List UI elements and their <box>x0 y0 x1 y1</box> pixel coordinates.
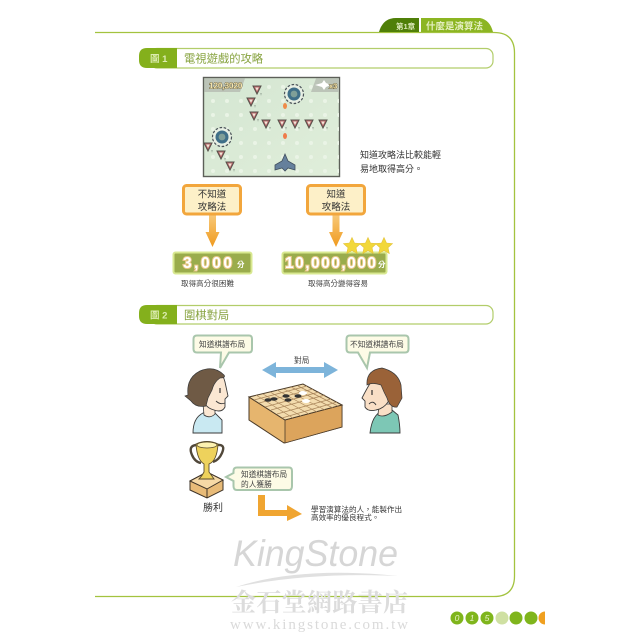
game screenshot <box>204 78 340 176</box>
speech bubble: winner: 知道棋譜布局 <box>241 469 287 479</box>
heading: figure 1 <box>139 48 493 68</box>
conclusion text: 高效率的優良程式。 <box>311 512 379 522</box>
watermark: 金石堂網路書店 <box>231 589 408 617</box>
double arrow <box>262 362 338 378</box>
person: right <box>362 368 402 433</box>
watermark <box>230 533 408 633</box>
page number dots: 5 <box>485 613 490 623</box>
side note: 知道攻略法比較能輕 <box>360 149 441 160</box>
go board <box>249 384 342 443</box>
speech bubble: winner <box>226 468 292 490</box>
game screenshot: 120,3020 <box>209 82 243 90</box>
flow: with strategy: 取得高分變得容易 <box>308 278 368 288</box>
flow: with strategy: 攻略法 <box>322 201 350 213</box>
page number dots: 1 <box>470 613 475 623</box>
icon: stars <box>344 238 392 254</box>
flow: with strategy <box>282 186 392 288</box>
flow: without strategy: 攻略法 <box>198 201 226 213</box>
arrow: conclusion <box>258 495 302 521</box>
heading: figure 1: 電視遊戲的攻略 <box>184 52 264 66</box>
person: left <box>185 369 228 433</box>
speech bubble: knows opening <box>194 336 252 368</box>
watermark: www.kingstone.com.tw <box>230 617 408 633</box>
chapter tab: 第1章 <box>396 21 416 31</box>
flow: without strategy: 不知道 <box>198 188 227 200</box>
flow: with strategy: 知道 <box>326 188 346 200</box>
speech bubble: knows opening: 知道棋譜布局 <box>199 339 245 349</box>
page number dots: 0 <box>455 613 460 623</box>
watermark: KingStone <box>233 533 398 574</box>
label: victory: 勝利 <box>203 501 223 514</box>
heading: figure 2: 圍棋對局 <box>184 308 229 322</box>
heading: figure 2: 圖 2 <box>150 310 167 322</box>
side note: 易地取得高分。 <box>360 163 423 174</box>
page frame <box>95 32 514 596</box>
chapter tab: 什麼是演算法 <box>426 20 484 32</box>
flow: without strategy: 3,000 <box>183 255 232 272</box>
heading: figure 1: 圖 1 <box>150 54 168 65</box>
trophy <box>190 442 223 498</box>
label: match: 對局 <box>294 355 310 365</box>
flow: without strategy: 取得高分很困難 <box>181 278 234 288</box>
flow: with strategy: 分 <box>378 260 386 269</box>
conclusion text: 學習演算法的人，能製作出 <box>311 504 402 514</box>
flow: without strategy <box>174 186 252 288</box>
flow: with strategy: 10,000,000 <box>285 255 376 272</box>
game screenshot: x3 <box>329 82 337 90</box>
chapter tab <box>379 18 493 32</box>
speech bubble: does not know opening <box>346 336 408 368</box>
speech bubble: winner: 的人獲勝 <box>241 479 272 489</box>
heading: figure 2 <box>139 305 493 324</box>
speech bubble: does not know opening: 不知道棋譜布局 <box>350 339 404 349</box>
flow: without strategy: 分 <box>237 260 245 269</box>
page number dots <box>450 612 545 624</box>
